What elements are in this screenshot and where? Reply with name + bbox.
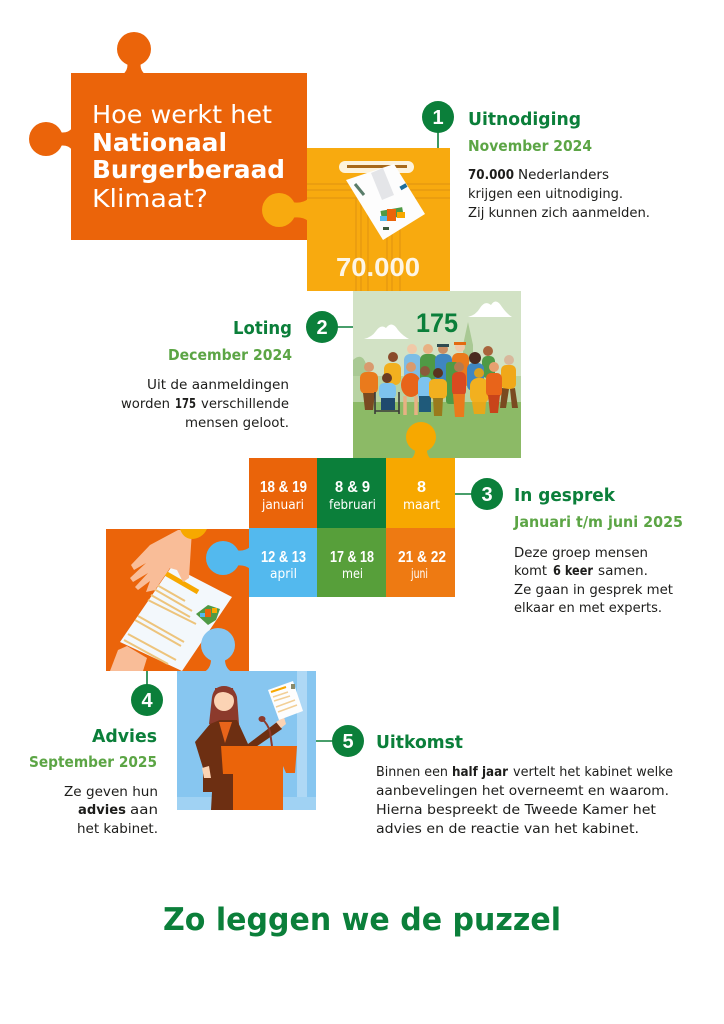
text block: step 3 In gesprek: 6 keer [553,564,594,579]
text block: step 1 Uitnodiging: 70.000 [468,168,514,183]
date: 18 & 19 januari [249,458,317,528]
heading: title: Klimaat? [92,184,208,213]
panel: title puzzle piece [29,32,307,240]
front row [360,362,502,417]
heading: title: Hoe werkt het [92,100,272,129]
text block: step 2 Loting: verschillende [201,397,289,412]
icon: upper hand [130,529,207,592]
blue knob of the april tile [206,541,250,575]
icon: microphone [262,719,272,746]
knob: yellow tab [406,422,436,459]
icon: speaker [195,686,286,810]
date: 12 & 13 april: 12 & 13 [261,549,306,566]
number: 175: 175 [416,308,458,338]
text block: step 4 Advies: September 2025 [29,753,157,771]
text block: step 4 Advies [29,726,158,837]
panel: step 1 puzzle piece with letterbox [262,148,450,291]
date: 21 & 22 juni: 21 & 22 [398,549,446,566]
panel: step 3 calendar puzzle [249,422,455,597]
panel: step 2 illustration of 175 citizens [353,291,521,458]
date: 18 & 19 januari: 18 & 19 [260,479,307,496]
icon: lectern [221,746,297,810]
text block: step 3 In gesprek: Deze groep mensen [514,546,648,561]
step 1 marker [422,101,454,148]
date: 21 & 22 juni: juni [410,567,428,582]
text block: step 5 Uitkomst: aanbevelingen het overneemt en waarom. [376,784,669,799]
heading: title: Nationaal [92,128,227,157]
step 3 marker [455,478,503,510]
icon: invitation card [346,164,425,240]
wheelchair person [375,373,399,414]
date: 8 & 9 februari: 8 & 9 [335,479,370,496]
icon: document in hand [268,681,303,720]
back row [384,342,518,408]
text block: step 1 Uitnodiging: Uitnodiging [468,109,581,130]
text block: step 2 Loting [121,318,292,431]
text block: step 4 Advies: Ze geven hun [64,785,158,800]
date: 8 maart [386,458,455,528]
step 2 marker [306,311,353,343]
date: 18 & 19 januari: januari [261,498,304,513]
text block: step 3 In gesprek: komt [514,564,547,579]
date: 8 & 9 februari [317,458,386,528]
people group [360,342,518,417]
text block: step 1 Uitnodiging: krijgen een uitnodiging. [468,187,623,202]
step 5 marker [316,725,364,757]
text block: step 2 Loting: December 2024 [168,346,292,364]
icon: advice document [120,566,232,671]
text block: step 5 Uitkomst: vertelt het kabinet welke [513,765,673,780]
step 1 marker: 1 [432,107,444,129]
church spire and hills [463,322,473,362]
date: 17 & 18 mei [317,528,386,597]
text block: step 3 In gesprek: In gesprek [514,485,616,506]
text block: step 1 Uitnodiging: November 2024 [468,137,592,155]
text block: step 4 Advies: Advies [92,726,157,747]
icon: letterbox slot [339,161,414,173]
step 4 marker: 4 [141,690,153,712]
text block: step 4 Advies: het kabinet. [77,822,158,837]
icon: lower hand [110,646,147,671]
text block: step 3 In gesprek: Ze gaan in gesprek met [514,583,673,598]
panel: step 4 illustration, handing over advice [106,529,250,671]
text block: step 5 Uitkomst: half jaar [452,765,509,780]
step 2 marker: 2 [316,317,328,339]
text block: step 3 In gesprek [513,485,683,616]
text block: step 5 Uitkomst: advies en de reactie van het kabinet. [376,822,639,837]
text block: step 5 Uitkomst: Hierna bespreekt de Tweede Kamer het [376,803,656,818]
text block: step 2 Loting: Loting [233,318,292,339]
date: 12 & 13 april [249,528,317,597]
text block: step 2 Loting: worden [121,397,170,412]
text block: step 1 Uitnodiging: Zij kunnen zich aanmelden. [468,206,650,221]
date: 8 maart: 8 [417,479,426,496]
text block: step 5 Uitkomst: Uitkomst [376,732,463,753]
text block: step 2 Loting: Uit de aanmeldingen [147,378,289,393]
heading: title [92,100,285,213]
text block: step 1 Uitnodiging [468,109,650,221]
panel: step 5 illustration, speaker at lectern [177,628,316,810]
text block: step 2 Loting: 175 [175,397,196,412]
date: 12 & 13 april: april [270,567,297,582]
date: 17 & 18 mei: 17 & 18 [330,549,374,566]
date: 8 maart: maart [403,498,440,513]
text block: step 3 In gesprek: samen. [598,564,648,579]
text block: step 5 Uitkomst [376,732,673,837]
text block: step 1 Uitnodiging: Nederlanders [518,168,609,183]
text block: step 4 Advies: advies [78,803,126,818]
step 5 marker: 5 [342,731,354,753]
date: 8 & 9 februari: februari [329,498,376,513]
text block: step 3 In gesprek: Januari t/m juni 2025 [513,513,683,531]
date: 17 & 18 mei: mei [342,567,363,582]
step 4 marker [131,671,163,716]
footer heading: Zo leggen we de puzzel [163,902,561,938]
date: 21 & 22 juni [386,528,455,597]
text block: step 3 In gesprek: elkaar en met experts. [514,601,662,616]
text block: step 2 Loting: mensen geloot. [185,416,289,431]
heading: title: Burgerberaad [92,155,285,184]
icon: clouds [364,301,512,339]
label: 70.000: 70.000 [336,252,420,282]
step 3 marker: 3 [481,484,493,506]
text block: step 5 Uitkomst: Binnen een [376,765,448,780]
text block: step 4 Advies: aan [130,803,158,818]
